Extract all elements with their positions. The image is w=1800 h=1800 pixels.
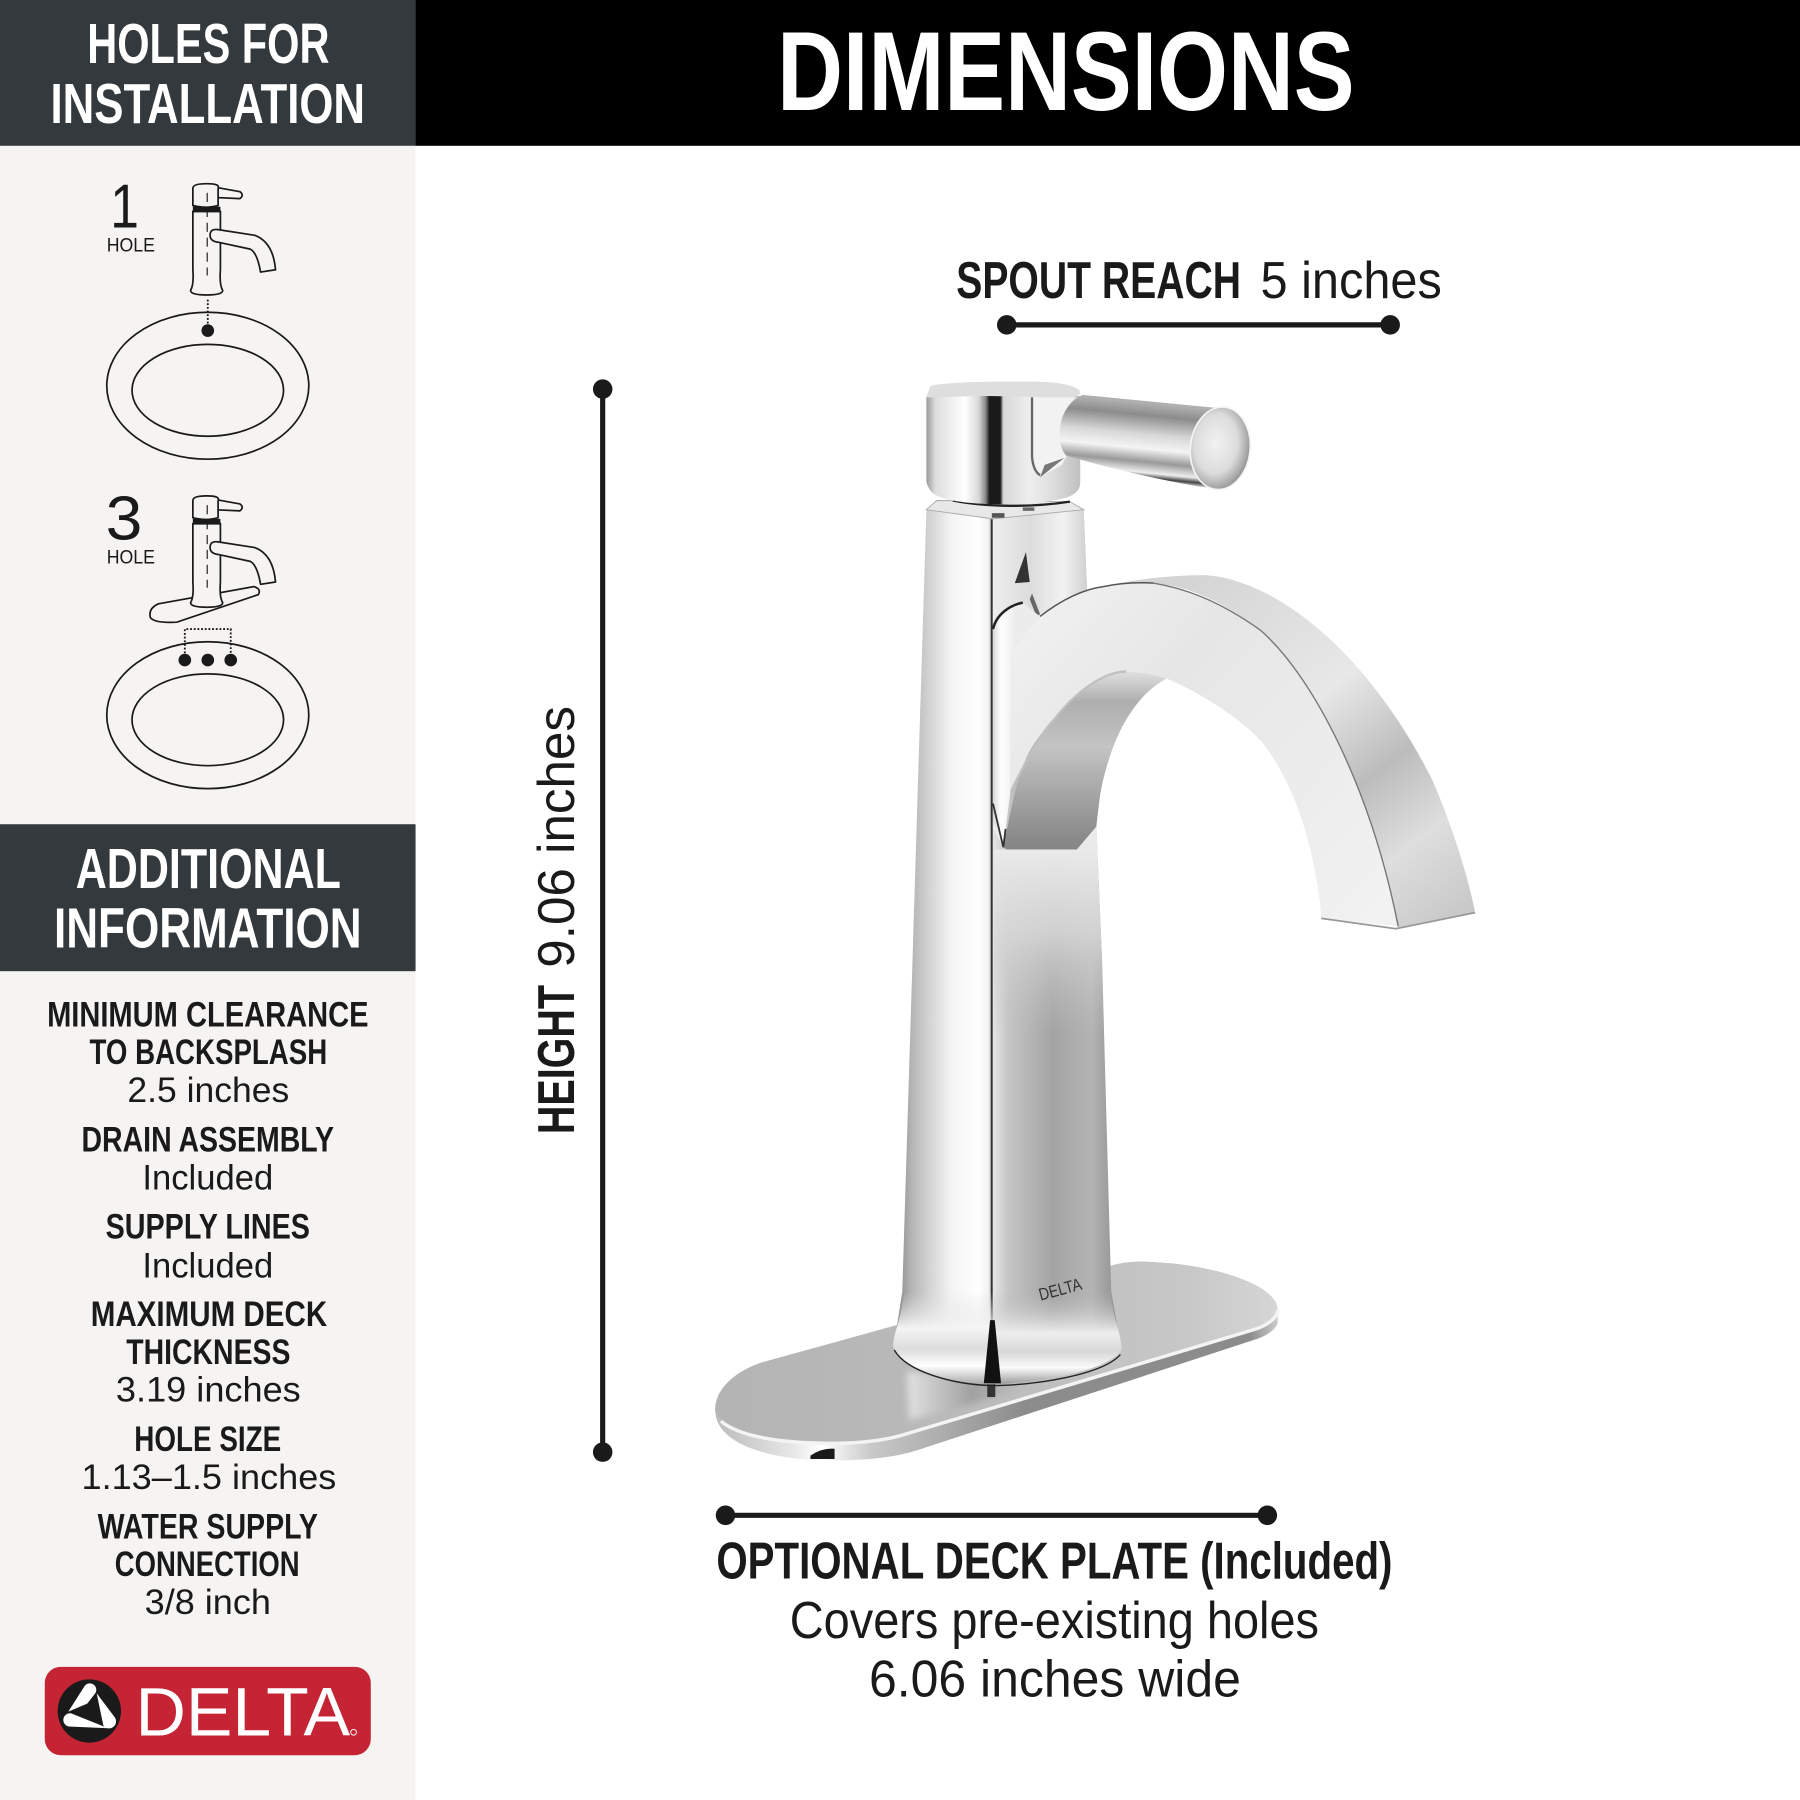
text block: maximum deck thickness: 3.19 inches xyxy=(116,1370,301,1410)
heading: holes for installation: HOLES FOR xyxy=(87,12,329,75)
deck plate dimension: OPTIONAL DECK PLATE (Included) xyxy=(716,1531,1392,1589)
icon: 1 hole faucet and basin: 1 xyxy=(110,172,139,241)
text block: water supply connection xyxy=(98,1506,318,1622)
text block: minimum clearance: 2.5 inches xyxy=(127,1070,289,1110)
text block: maximum deck thickness xyxy=(91,1294,327,1410)
deck plate dimension: Covers pre-existing holes xyxy=(790,1591,1319,1649)
icon: 3 hole faucet, deck plate and basin: 3 xyxy=(106,485,142,554)
text block: hole size: HOLE SIZE xyxy=(134,1419,281,1459)
faucet collar xyxy=(926,501,1084,519)
text block: supply lines xyxy=(106,1207,310,1286)
heading: holes for installation: INSTALLATION xyxy=(51,72,365,135)
faucet handle cap xyxy=(1186,404,1254,492)
heading: holes for installation xyxy=(0,0,416,146)
heading: additional information: INFORMATION xyxy=(54,897,362,960)
text block: drain assembly: DRAIN ASSEMBLY xyxy=(82,1119,334,1159)
text block: supply lines: SUPPLY LINES xyxy=(106,1207,310,1247)
title: dimensions xyxy=(416,0,1800,146)
text block: maximum deck thickness: THICKNESS xyxy=(126,1332,290,1372)
text block: drain assembly xyxy=(82,1119,334,1197)
spout reach dimension: SPOUT REACH xyxy=(956,251,1241,309)
spout underside xyxy=(1003,672,1166,849)
faucet handle lever xyxy=(1060,395,1226,489)
icon: 3 hole faucet, deck plate and basin: HOLE xyxy=(107,547,155,569)
title: dimensions: DIMENSIONS xyxy=(777,8,1355,134)
icon: 1 hole faucet and basin xyxy=(107,172,309,459)
faucet body left facet xyxy=(894,510,992,1343)
product: chrome faucet with deck plate xyxy=(715,382,1475,1460)
faucet base flare xyxy=(893,1286,1122,1386)
text block: water supply connection: CONNECTION xyxy=(115,1544,300,1584)
text block: minimum clearance: MINIMUM CLEARANCE xyxy=(47,994,368,1034)
deck plate dimension: 6.06 inches wide xyxy=(869,1650,1241,1708)
logo: delta xyxy=(45,1667,371,1755)
faucet head xyxy=(926,382,1080,504)
spout front face xyxy=(1010,583,1398,926)
text block: minimum clearance: TO BACKSPLASH xyxy=(90,1032,327,1072)
text block: hole size: 1.13–1.5 inches xyxy=(82,1457,336,1497)
text block: supply lines: Included xyxy=(142,1246,273,1286)
logo: delta: DELTA xyxy=(135,1674,350,1751)
text block: minimum clearance xyxy=(47,994,368,1110)
height dimension: HEIGHT xyxy=(527,985,585,1134)
faucet body shoulder shading xyxy=(992,510,1104,1320)
spout outer face xyxy=(1103,575,1475,929)
faucet body right facet xyxy=(992,510,1120,1343)
text block: hole size xyxy=(82,1419,336,1497)
spout root fillet xyxy=(993,603,1040,847)
height dimension: 9.06 inches xyxy=(527,706,585,968)
text block: water supply connection: WATER SUPPLY xyxy=(98,1506,318,1546)
heading: additional information xyxy=(0,824,416,971)
icon: 1 hole faucet and basin: HOLE xyxy=(107,234,155,256)
height dimension xyxy=(527,379,612,1462)
text block: maximum deck thickness: MAXIMUM DECK xyxy=(91,1294,327,1334)
deck plate xyxy=(715,1262,1278,1460)
panel: sidebar xyxy=(0,146,416,1800)
spout reach dimension xyxy=(956,251,1442,335)
heading: additional information: ADDITIONAL xyxy=(76,837,341,900)
icon: 3 hole faucet, deck plate and basin xyxy=(106,485,309,789)
text block: drain assembly: Included xyxy=(142,1157,273,1197)
text block: water supply connection: 3/8 inch xyxy=(145,1582,271,1622)
deck plate dimension xyxy=(716,1506,1392,1708)
brand mark on faucet: DELTA xyxy=(1036,1274,1084,1305)
spout reach dimension: 5 inches xyxy=(1260,251,1442,309)
